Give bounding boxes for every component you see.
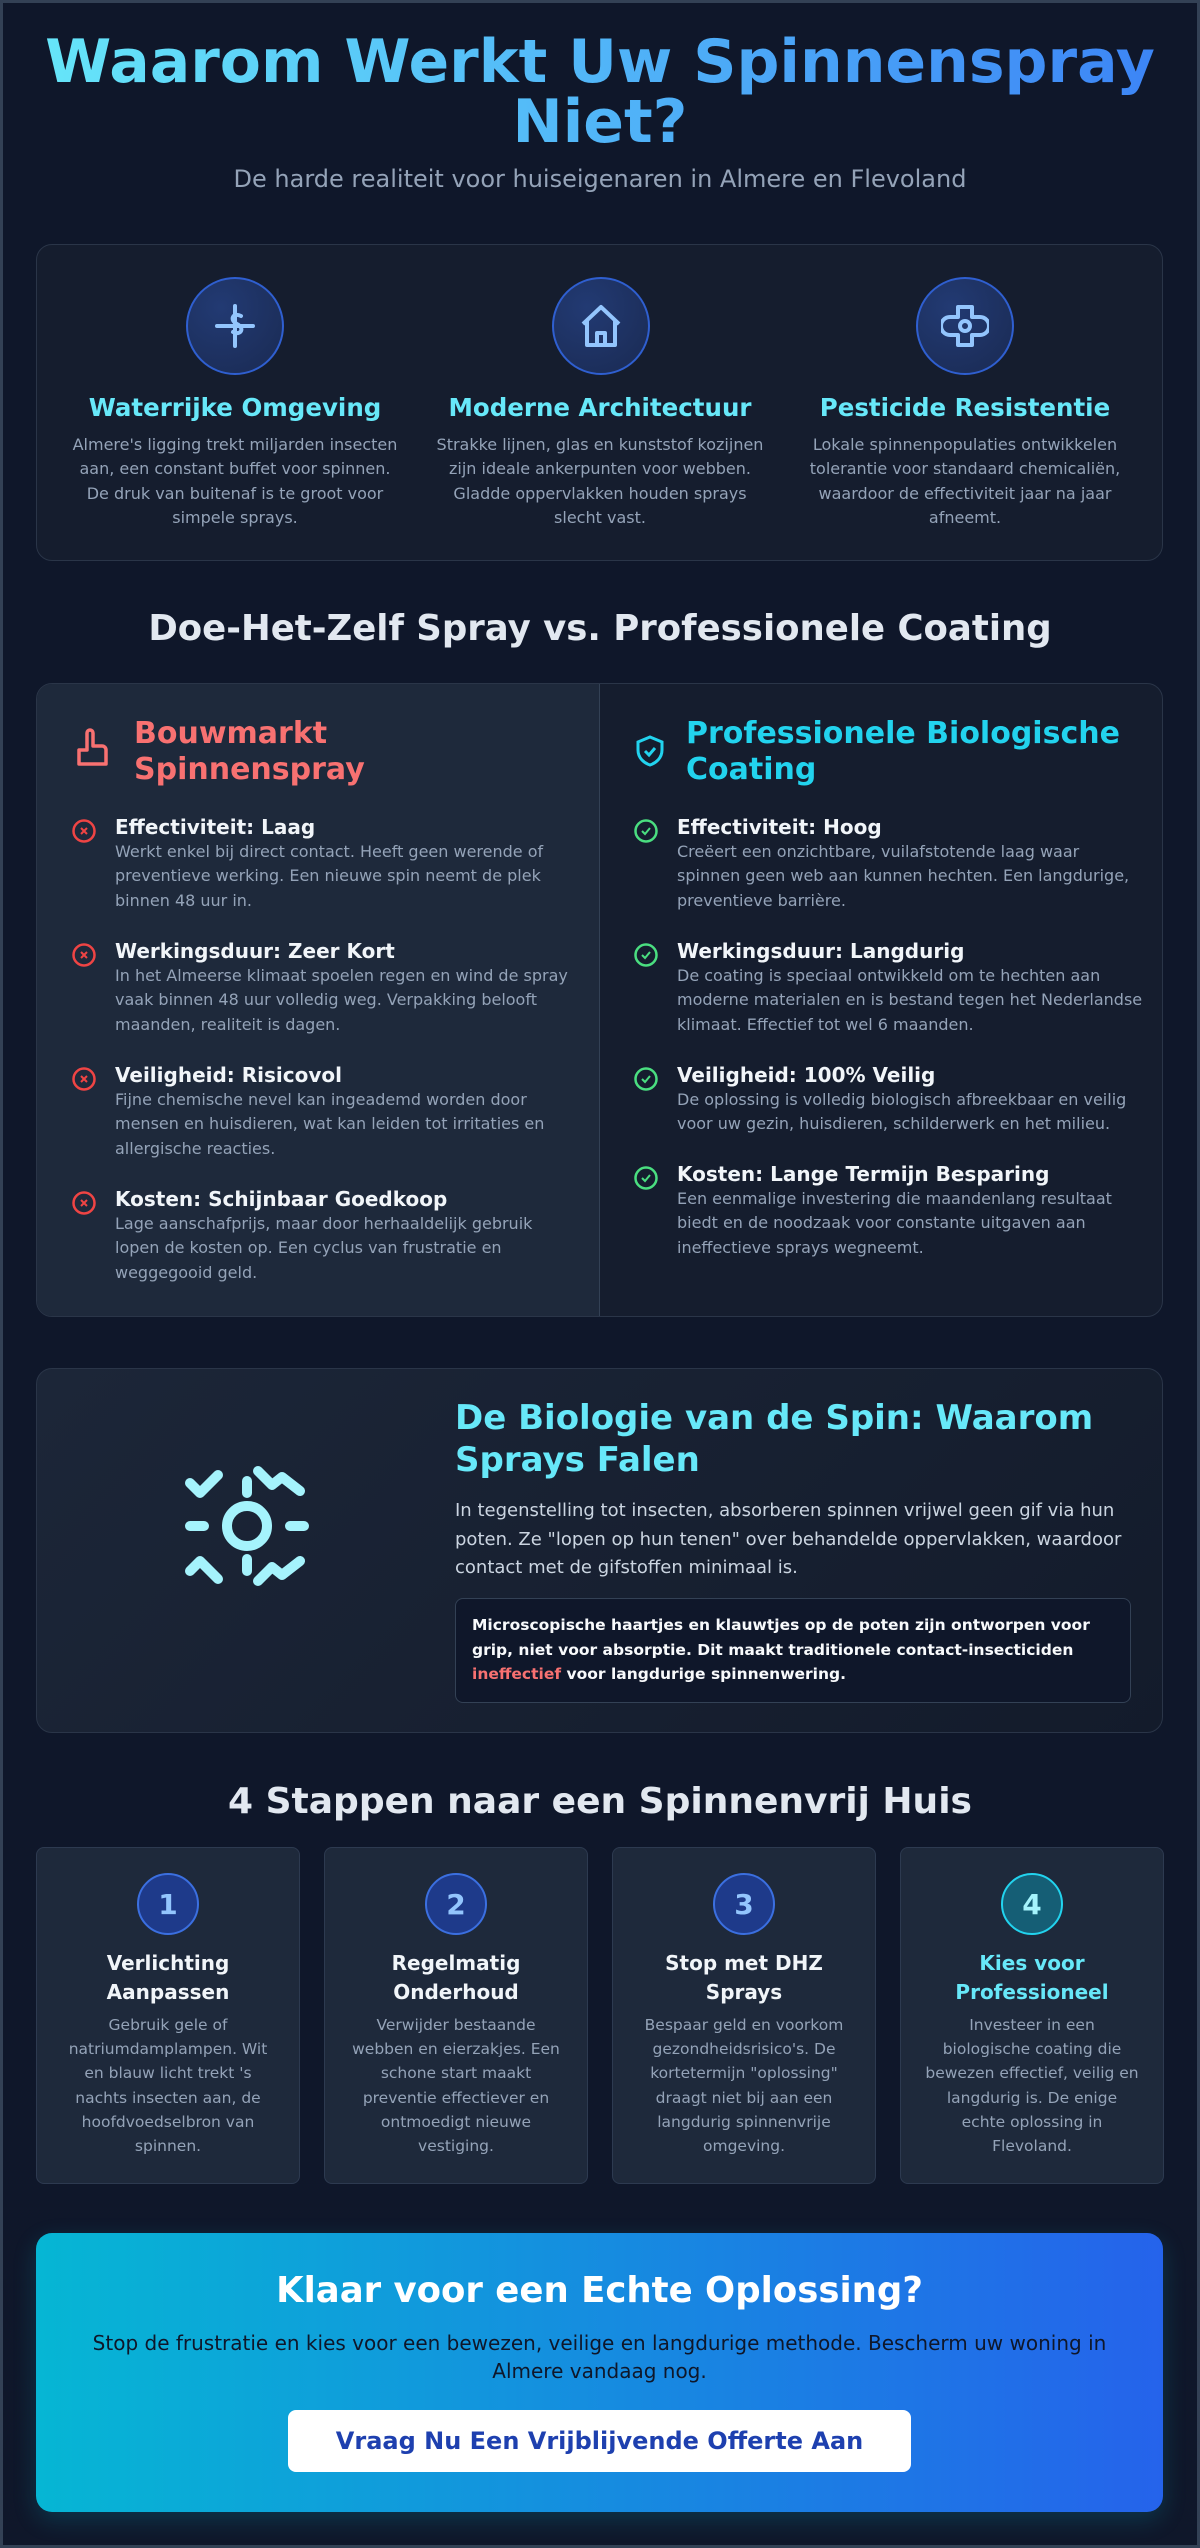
heading: bouwmarkt: Spinnenspray	[134, 752, 365, 787]
panel: causes: Strakke lijnen, glas en kunststof kozijnen zijn ideale ankerpunten voor webben. Gladde oppervlakken houden sprays slecht vast.	[437, 435, 763, 527]
step 3: 3	[734, 1888, 754, 1920]
step 4: Kies voor Professioneel	[955, 1951, 1109, 2004]
heading: professioneel: Professionele Biologische	[686, 716, 1120, 751]
heading: steps: 4 Stappen naar een Spinnenvrij Huis	[228, 1781, 972, 1822]
item: werkingsduur: In het Almeerse klimaat spoelen regen en wind de spray vaak binnen 48 uur volledig weg. Verpakking belooft maanden, realiteit is dagen.	[115, 966, 568, 1034]
heading: professioneel	[686, 716, 1120, 787]
icon: shield	[636, 735, 664, 767]
panel: biology	[36, 1368, 1163, 1733]
step 2: Regelmatig Onderhoud	[392, 1951, 520, 2004]
step 3	[612, 1847, 876, 2184]
heading: bouwmarkt: Bouwmarkt	[134, 716, 327, 751]
item: veilig	[634, 1063, 1126, 1133]
icon: house	[552, 277, 650, 375]
item: effectiviteit hoog	[634, 815, 1129, 910]
panel: causes: Lokale spinnenpopulaties ontwikkelen tolerantie voor standaard chemicaliën, waardoor de effectiviteit jaar na jaar afneemt.	[810, 435, 1120, 527]
step 1	[36, 1847, 300, 2184]
item: effectiviteit hoog: Creëert een onzichtbare, vuilafstotende laag waar spinnen geen web aan kunnen hechten. Een langdurige, preventieve barrière.	[677, 842, 1129, 910]
step 1: 1	[158, 1888, 178, 1920]
item: veiligheid: Fijne chemische nevel kan ingeademd worden door mensen en huisdieren, wat kan leiden tot irritaties en allergische reacties.	[115, 1090, 544, 1158]
list: spray cons	[72, 815, 568, 1282]
step 4	[900, 1847, 1164, 2184]
heading: biologie: Sprays Falen	[455, 1440, 700, 1480]
item: kosten: Kosten: Schijnbaar Goedkoop	[115, 1187, 447, 1211]
item: besparing	[634, 1162, 1112, 1257]
title	[10, 32, 1190, 152]
item: kosten: Lage aanschafprijs, maar door herhaaldelijk gebruik lopen de kosten op. Een cyclus van frustratie en weggegooid geld.	[115, 1214, 532, 1282]
heading: biologie	[455, 1398, 1093, 1480]
item: werkingsduur: Werkingsduur: Zeer Kort	[115, 939, 395, 963]
icon: resistance	[916, 277, 1014, 375]
item: veiligheid	[72, 1063, 544, 1158]
step 2	[324, 1847, 588, 2184]
item: langdurig: De coating is speciaal ontwikkeld om te hechten aan moderne materialen en is bestand tegen het Nederlandse klimaat. Effectief tot wel 6 maanden.	[677, 966, 1142, 1034]
title: Niet?	[513, 87, 687, 157]
title: Waarom Werkt Uw Spinnenspray	[45, 27, 1155, 97]
step 1: Verlichting Aanpassen	[107, 1951, 229, 2004]
feature: waterrijke: Waterrijke Omgeving	[89, 393, 381, 422]
step 3: Bespaar geld en voorkom gezondheidsrisico's. De kortetermijn "oplossing" draagt niet bij aan een langdurig spinnenvrije omgeving.	[645, 2016, 843, 2155]
step 2: 2	[446, 1888, 466, 1920]
item: veiligheid: Veiligheid: Risicovol	[115, 1063, 342, 1087]
step 4: 4	[1022, 1888, 1042, 1920]
callout	[455, 1598, 1131, 1703]
panel: causes	[36, 244, 1163, 561]
item: effectiviteit hoog: Effectiviteit: Hoog	[677, 815, 882, 839]
panel: comparison	[36, 683, 1163, 1317]
list: coating pros	[634, 815, 1142, 1257]
item: werkingsduur	[72, 939, 568, 1034]
heading: biologie: De Biologie van de Spin: Waarom	[455, 1398, 1093, 1438]
item: effectiviteit laag	[72, 815, 544, 910]
item: langdurig: Werkingsduur: Langdurig	[677, 939, 964, 963]
icon: finger	[77, 728, 108, 766]
CTA panel	[36, 2233, 1163, 2512]
step 2: Verwijder bestaande webben en eierzakjes. Een schone start maakt preventie effectiever en ontmoedigt nieuwe vestiging.	[352, 2016, 560, 2155]
item: besparing: Een eenmalige investering die maandenlang resultaat biedt en de noodzaak voor constante uitgaven aan ineffectieve sprays wegneemt.	[677, 1189, 1112, 1257]
feature: resistentie: Pesticide Resistentie	[820, 393, 1110, 422]
step 4: Investeer in een biologische coating die bewezen effectief, veilig en langdurig is. De enige echte oplossing in Flevoland.	[925, 2016, 1139, 2155]
item: besparing: Kosten: Lange Termijn Besparing	[677, 1162, 1049, 1186]
item: veilig: Veiligheid: 100% Veilig	[677, 1063, 935, 1087]
heading: professioneel: Coating	[686, 752, 816, 787]
callout: Microscopische haartjes en klauwtjes op de poten zijn ontworpen voor grip, niet voor absorptie. Dit maakt traditionele contact-insecticiden ineffectief voor langdurige spinnenwering.	[472, 1616, 1090, 1683]
panel: causes: Almere's ligging trekt miljarden insecten aan, een constant buffet voor spinnen. De druk van buitenaf is te groot voor simpele sprays.	[73, 435, 397, 527]
CTA text: Stop de frustratie en kies voor een bewezen, veilige en langdurige methode. Bescherm uw woning in Almere vandaag nog.	[93, 2331, 1106, 2383]
item: langdurig	[634, 939, 1142, 1034]
icon: spider	[185, 1466, 309, 1586]
text: biologie: In tegenstelling tot insecten, absorberen spinnen vrijwel geen gif via hun poten. Ze "lopen op hun tenen" over behandelde oppervlakken, waardoor contact met de gifstoffen minimaal is.	[455, 1500, 1121, 1578]
feature: architectuur: Moderne Architectuur	[448, 393, 751, 422]
CTA title: Klaar voor een Echte Oplossing?	[276, 2270, 923, 2311]
heading: comparison: Doe-Het-Zelf Spray vs. Professionele Coating	[148, 608, 1052, 649]
heading: bouwmarkt	[134, 716, 365, 787]
CTA button: Vraag Nu Een Vrijblijvende Offerte Aan	[336, 2427, 863, 2455]
item: effectiviteit laag: Effectiviteit: Laag	[115, 815, 315, 839]
CTA button	[288, 2410, 911, 2472]
item: veilig: De oplossing is volledig biologisch afbreekbaar en veilig voor uw gezin, huisdieren, schilderwerk en het milieu.	[677, 1090, 1126, 1133]
step 3: Stop met DHZ Sprays	[665, 1951, 823, 2004]
item: kosten	[72, 1187, 532, 1282]
step 1: Gebruik gele of natriumdamplampen. Wit en blauw licht trekt 's nachts insecten aan, de hoofdvoedselbron van spinnen.	[69, 2016, 267, 2155]
subtitle: De harde realiteit voor huiseigenaren in Almere en Flevoland	[234, 165, 966, 193]
item: effectiviteit laag: Werkt enkel bij direct contact. Heeft geen werende of preventieve werking. Een nieuwe spin neemt de plek binnen 48 uur in.	[115, 842, 543, 910]
icon: water	[186, 277, 284, 375]
